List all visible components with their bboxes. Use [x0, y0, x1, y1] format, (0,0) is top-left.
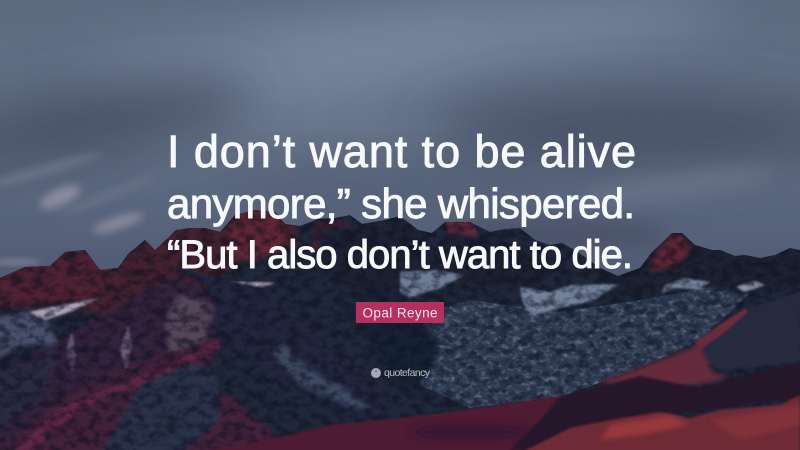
dark diagonal shoulder	[168, 265, 262, 293]
right dark slope	[690, 292, 800, 370]
mountain range	[0, 200, 800, 450]
bright red ridge	[522, 395, 800, 450]
dark band	[510, 362, 800, 450]
author badge	[356, 302, 444, 323]
quote text: “But I also don’t want to die.	[167, 233, 633, 277]
watermark logo: “	[375, 370, 378, 378]
quote text	[167, 126, 636, 277]
watermark logo: quotefancy	[384, 367, 431, 379]
left snow and streaks	[0, 310, 60, 360]
red summit	[650, 234, 692, 272]
foreground ridges	[200, 292, 800, 450]
snow fields	[400, 270, 465, 298]
quote text: I don’t want to be alive	[167, 126, 636, 177]
grey rock face	[420, 287, 748, 408]
texture	[0, 210, 800, 450]
author badge: Opal Reyne	[362, 306, 438, 320]
lower maroon ridge	[0, 338, 300, 450]
red lit patch	[600, 345, 730, 390]
quote text: anymore,” she whispered.	[167, 180, 635, 227]
dark crags	[318, 224, 422, 292]
maroon foothill	[200, 395, 590, 450]
maroon left massif	[0, 205, 300, 320]
